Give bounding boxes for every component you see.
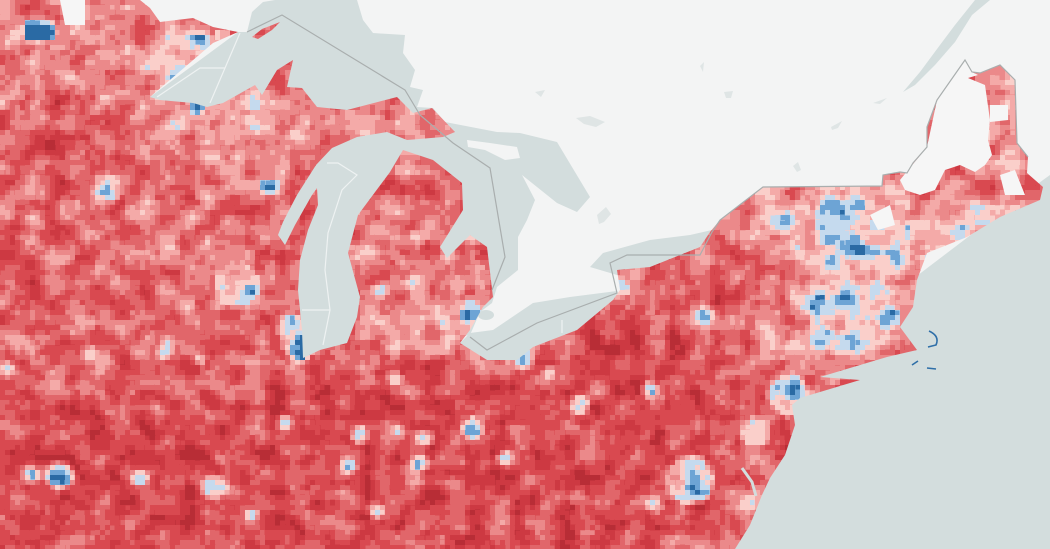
border: international boundary [247, 15, 1028, 350]
no-data areas: northern Maine [60, 0, 1025, 230]
water: Atlantic Ocean [700, 175, 1050, 549]
water: St. Lawrence River [903, 0, 990, 92]
island: Manitoulin [467, 140, 520, 160]
borders: state lines in lakes [157, 33, 562, 345]
water: Lake Ontario [590, 230, 712, 275]
water: small Canadian lakes [535, 62, 887, 224]
water: Lake St. Clair [478, 310, 494, 320]
water: Lake Erie [460, 291, 620, 365]
water: Lakes Superior, Michigan and Huron [150, 0, 590, 360]
water: Delaware Bay [742, 468, 756, 496]
islands: Cape Cod, Nantucket and Martha's Vineyard [912, 331, 937, 369]
